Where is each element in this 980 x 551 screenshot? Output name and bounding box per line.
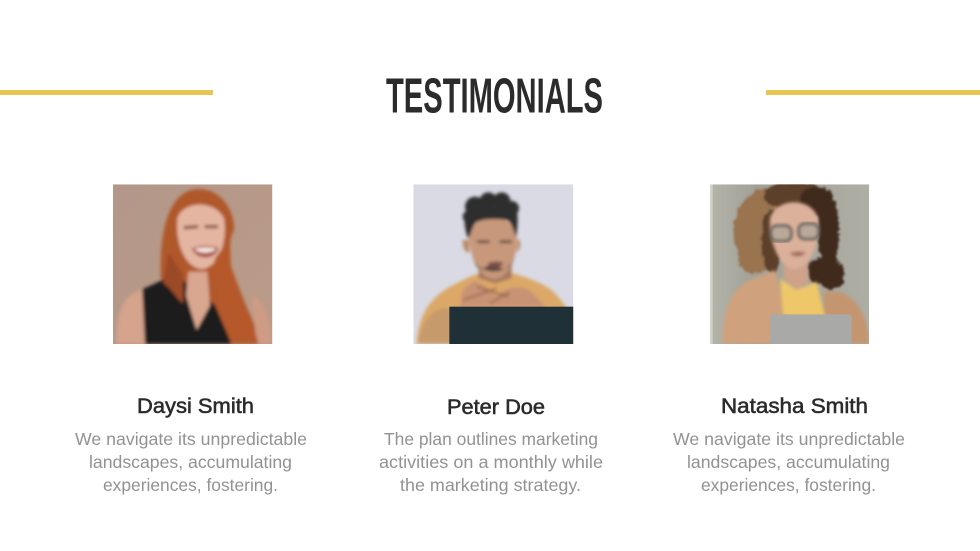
- quote: Daysi Smith: experiences, fostering.: [103, 475, 278, 495]
- name: Peter Doe: Peter Doe: [447, 396, 545, 419]
- quote: Natasha Smith: experiences, fostering.: [701, 475, 876, 495]
- quote: Daysi Smith: [75, 429, 307, 495]
- photo: Peter Doe: [413, 184, 573, 344]
- quote: Natasha Smith: We navigate its unpredictable: [673, 429, 905, 449]
- photo: Natasha Smith: [710, 182, 869, 344]
- quote: Peter Doe: activities on a monthly while: [379, 452, 603, 472]
- quote: Daysi Smith: We navigate its unpredictable: [75, 429, 307, 449]
- quote: Peter Doe: the marketing strategy.: [400, 475, 581, 495]
- quote: Daysi Smith: landscapes, accumulating: [89, 452, 292, 472]
- quote: Peter Doe: The plan outlines marketing: [384, 429, 598, 449]
- photo: Daysi Smith: [113, 184, 272, 344]
- name: Daysi Smith: Daysi Smith: [137, 395, 254, 418]
- left accent line: [0, 90, 213, 95]
- quote: Natasha Smith: [673, 429, 905, 495]
- quote: Peter Doe: [379, 429, 603, 495]
- title: TESTIMONIALS: [386, 70, 603, 124]
- name: Natasha Smith: Natasha Smith: [721, 395, 868, 418]
- testimonial: Natasha Smith: [673, 395, 905, 495]
- testimonial: Peter Doe: [379, 396, 603, 495]
- testimonial: Daysi Smith: [75, 395, 307, 495]
- right accent line: [766, 90, 980, 95]
- quote: Natasha Smith: landscapes, accumulating: [687, 452, 890, 472]
